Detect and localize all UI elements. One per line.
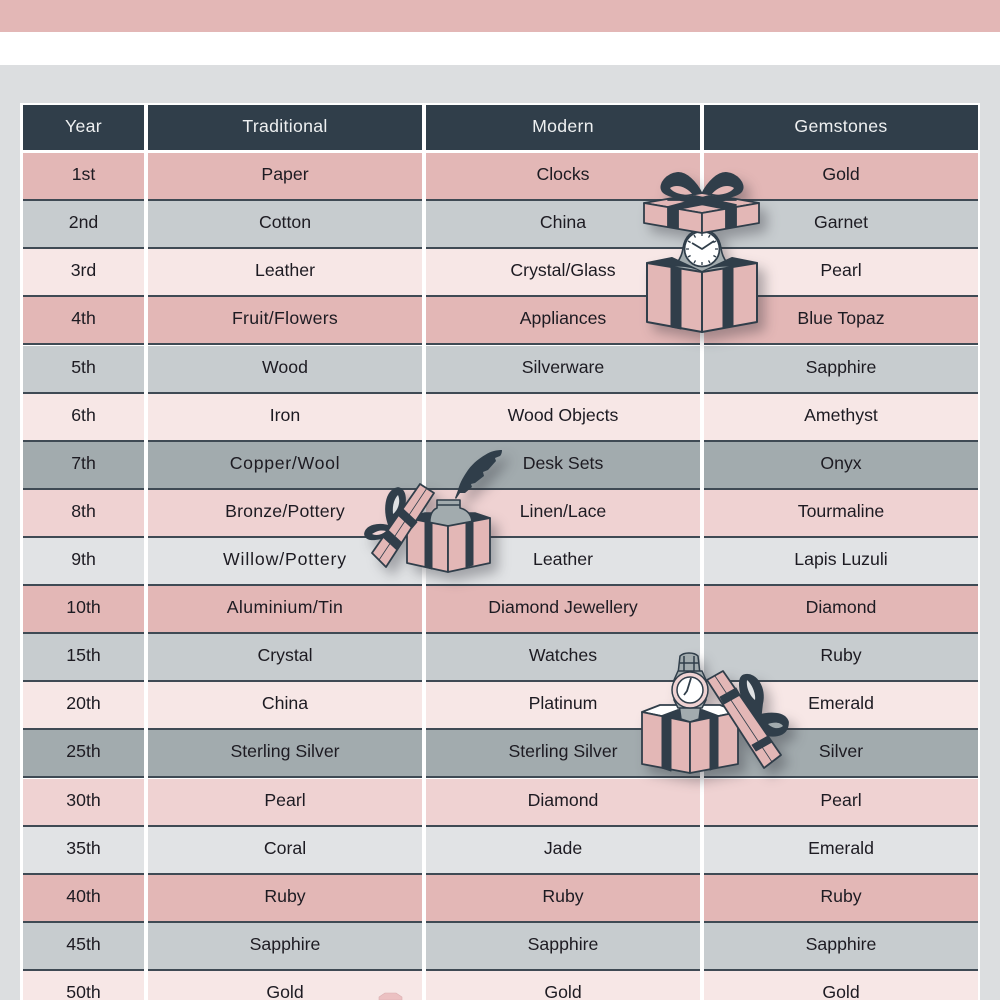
row: 15th: Crystal xyxy=(257,645,313,665)
row: 35th: Emerald xyxy=(808,838,874,858)
table header: Traditional xyxy=(242,116,328,136)
row: 10th: Diamond xyxy=(806,597,876,617)
row: 4th: 4th xyxy=(71,308,96,328)
row: 15th xyxy=(23,634,978,682)
row: 6th xyxy=(23,394,978,442)
row: 3rd xyxy=(23,249,978,297)
row: 4th xyxy=(23,297,978,345)
row: 40th: Ruby xyxy=(264,886,306,906)
gift box lid with bow xyxy=(707,671,788,768)
row: 50th xyxy=(23,971,978,1000)
row: 5th: Sapphire xyxy=(806,356,876,376)
row: 9th xyxy=(23,538,978,586)
gift box base xyxy=(647,258,757,332)
row: 45th: 45th xyxy=(66,934,101,954)
row: 3rd: Crystal/Glass xyxy=(510,260,616,280)
row: 1st: 1st xyxy=(72,164,95,184)
row: 9th: Willow/Pottery xyxy=(223,549,347,569)
row: 5th: 5th xyxy=(71,356,96,376)
row: 4th: Appliances xyxy=(520,308,606,328)
ink bottle xyxy=(430,500,472,526)
gift box interior xyxy=(642,705,738,722)
row: 6th: Amethyst xyxy=(804,405,878,425)
row: 20th: Emerald xyxy=(808,693,874,713)
row: 30th xyxy=(23,779,978,827)
row: 45th xyxy=(23,923,978,971)
row: 1st: Clocks xyxy=(536,164,590,184)
row: 6th: Wood Objects xyxy=(508,405,618,425)
row: 7th: 7th xyxy=(71,453,96,473)
top banner xyxy=(0,0,1000,32)
row: 30th: 30th xyxy=(66,790,101,810)
row: 7th xyxy=(23,442,978,490)
row: 20th: China xyxy=(262,693,308,713)
row: 4th: Fruit/Flowers xyxy=(232,308,338,328)
wristwatch xyxy=(672,653,708,722)
row: 25th: Silver xyxy=(819,741,863,761)
row: 25th xyxy=(23,730,978,778)
row: 7th: Onyx xyxy=(820,453,862,473)
row: 20th: Platinum xyxy=(529,693,597,713)
row: 8th: Bronze/Pottery xyxy=(225,501,345,521)
row: 1st: Paper xyxy=(261,164,309,184)
row: 1st xyxy=(23,153,978,201)
row: 20th xyxy=(23,682,978,730)
table header: Year xyxy=(65,116,102,136)
row: 3rd: Pearl xyxy=(820,260,862,280)
icon: gift box with clock xyxy=(644,173,759,332)
row: 2nd: Garnet xyxy=(814,212,868,232)
row: 9th: Leather xyxy=(533,549,593,569)
row: 9th: Lapis Luzuli xyxy=(794,549,888,569)
row: 5th xyxy=(23,346,978,394)
row: 8th: Tourmaline xyxy=(798,501,884,521)
row: 45th: Sapphire xyxy=(528,934,598,954)
row: 35th: Jade xyxy=(544,838,582,858)
gift box interior xyxy=(407,513,490,526)
row: 25th: Sterling Silver xyxy=(508,741,618,761)
row: 7th: Desk Sets xyxy=(523,453,603,473)
row: 2nd: China xyxy=(540,212,586,232)
row: 10th: 10th xyxy=(66,597,101,617)
row: 9th: 9th xyxy=(71,549,96,569)
row: 2nd xyxy=(23,201,978,249)
row: 35th xyxy=(23,827,978,875)
clock xyxy=(664,230,740,284)
row: 20th: 20th xyxy=(66,693,101,713)
row: 8th: Linen/Lace xyxy=(520,501,606,521)
icon: gift box with ink bottle and quill xyxy=(365,450,502,572)
quill feather xyxy=(455,450,502,499)
row: 6th: 6th xyxy=(71,405,96,425)
row: 40th: Ruby xyxy=(820,886,862,906)
row: 35th: Coral xyxy=(264,838,306,858)
table header: Modern xyxy=(532,116,594,136)
row: 2nd: 2nd xyxy=(69,212,98,232)
row: 45th: Sapphire xyxy=(250,934,320,954)
row: 25th: Sterling Silver xyxy=(230,741,340,761)
row: 6th: Iron xyxy=(270,405,300,425)
row: 40th: 40th xyxy=(66,886,101,906)
table header: Gemstones xyxy=(794,116,888,136)
row: 8th xyxy=(23,490,978,538)
table header xyxy=(23,105,978,150)
row: 1st: Gold xyxy=(822,164,860,184)
row: 15th: Ruby xyxy=(820,645,862,665)
row: 8th: 8th xyxy=(71,501,96,521)
row: 5th: Silverware xyxy=(522,356,604,376)
row: 30th: Pearl xyxy=(820,790,862,810)
row: 30th: Diamond xyxy=(528,790,598,810)
icon: gift box with wristwatch xyxy=(642,653,788,773)
row: 10th xyxy=(23,586,978,634)
gift box base xyxy=(407,518,490,572)
row: 35th: 35th xyxy=(66,838,101,858)
row: 25th: 25th xyxy=(66,741,101,761)
white band xyxy=(0,32,1000,65)
row: 10th: Aluminium/Tin xyxy=(227,597,343,617)
icon: pink gem xyxy=(379,993,402,1000)
row: 40th xyxy=(23,875,978,923)
row: 15th: Watches xyxy=(529,645,597,665)
row: 40th: Ruby xyxy=(542,886,584,906)
gift box base xyxy=(642,712,738,773)
row: 45th: Sapphire xyxy=(806,934,876,954)
row: 4th: Blue Topaz xyxy=(797,308,885,328)
row: 30th: Pearl xyxy=(264,790,306,810)
row: 3rd: 3rd xyxy=(71,260,96,280)
gift box lid with bow xyxy=(644,173,759,233)
row: 7th: Copper/Wool xyxy=(230,453,340,473)
gift box lid with bow xyxy=(365,484,434,567)
row: 3rd: Leather xyxy=(255,260,315,280)
row: 5th: Wood xyxy=(262,356,308,376)
row: 15th: 15th xyxy=(66,645,101,665)
row: 2nd: Cotton xyxy=(259,212,311,232)
row: 10th: Diamond Jewellery xyxy=(488,597,638,617)
